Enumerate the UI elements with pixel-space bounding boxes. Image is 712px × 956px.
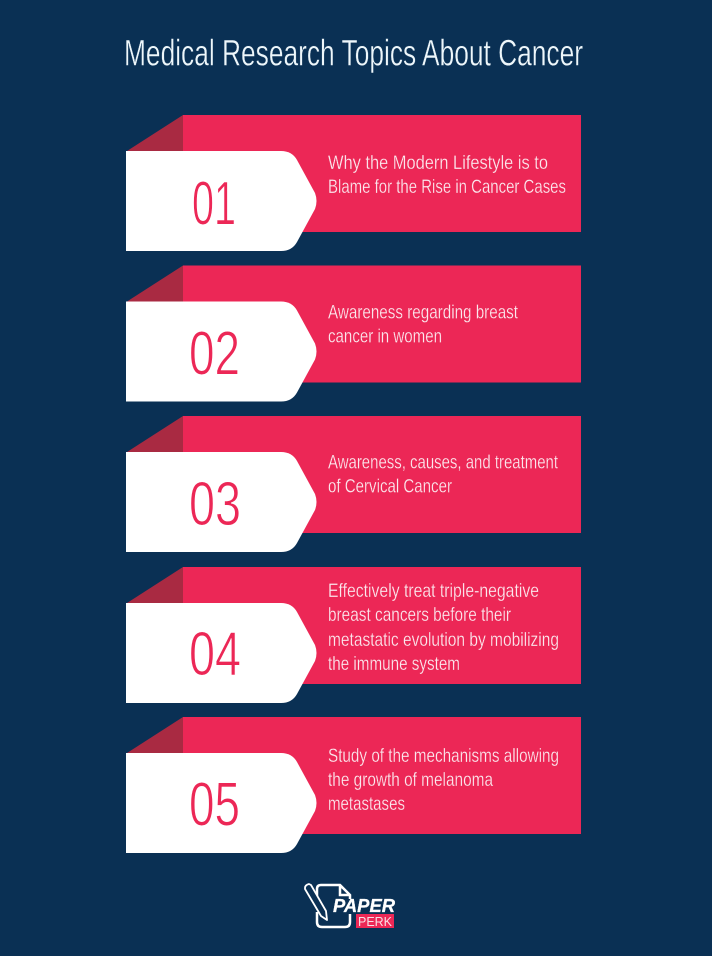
panel: item 04: Effectively treat triple-negative [328,580,539,602]
panel: item 04: breast cancers before their [328,604,511,626]
panel: item 01 [126,115,581,251]
panel: item 03: of Cervical Cancer [328,476,452,498]
panel: item 05: metastases [328,793,405,815]
panel: item 01: 01 [192,170,236,238]
panel: item 02: cancer in women [328,326,442,348]
icon: document [317,885,350,927]
panel: item 03: 03 [189,470,241,539]
wordmark: paper: PAPER [333,896,395,916]
panel: item 05 [126,717,581,853]
panel: item 04: the immune system [328,653,460,675]
panel: item 05: 05 [189,770,240,840]
panel: item 01: Why the Modern Lifestyle is to [328,152,548,174]
panel: item 01: Blame for the Rise in Cancer Cases [328,176,566,198]
panel: item 03 [126,416,581,552]
panel: item 04 [126,567,581,703]
panel: item 02: 02 [189,320,240,388]
panel: item 03: Awareness, causes, and treatment [328,452,558,474]
wordmark: perk: PERK [358,914,392,929]
panel: item 04: metastatic evolution by mobilizing [328,629,559,651]
logo: Paper Perk [305,884,395,929]
panel: item 02: Awareness regarding breast [328,302,518,324]
icon: pencil [305,884,327,920]
panel: item 02 [126,266,581,402]
panel: item 05: Study of the mechanisms allowing [328,745,559,767]
panel: item 04: 04 [189,620,241,689]
panel: item 05: the growth of melanoma [328,769,493,791]
